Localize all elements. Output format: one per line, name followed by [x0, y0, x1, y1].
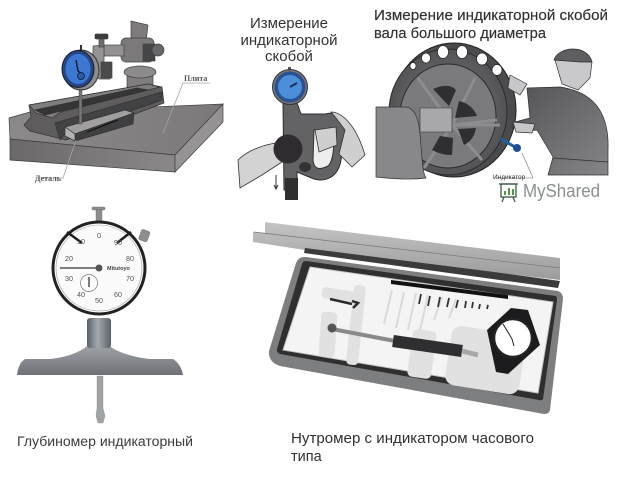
dial numbers: 60: [114, 290, 122, 299]
snap gauge heading: индикаторной: [240, 32, 338, 49]
brand: Mitutoyo: [107, 266, 131, 272]
small down arrow: [274, 175, 278, 189]
label: part: Деталь: [35, 174, 62, 183]
dial: [53, 222, 145, 314]
machine column and clamp: [93, 21, 164, 88]
bore gauge caption: Нутромер с индикатором часового: [291, 431, 534, 447]
tray: [283, 267, 553, 393]
probe: [96, 376, 105, 423]
left hand: [238, 142, 285, 188]
illustration: depth gauge: [17, 207, 193, 449]
indicator stem: [79, 88, 82, 124]
dial numbers: 70: [126, 274, 134, 283]
dial numbers: 20: [65, 254, 73, 263]
dial numbers: 30: [65, 274, 73, 283]
leader lines: [35, 83, 210, 178]
gauge body: [283, 103, 345, 200]
base: [17, 344, 183, 375]
wrench: [330, 299, 358, 308]
illustration: dial indicator on surface plate: [9, 21, 223, 183]
flywheel: [389, 43, 516, 177]
small rods: [384, 290, 456, 330]
blue dial: [272, 67, 308, 104]
label: plate: Плита: [184, 74, 207, 83]
logo icon: [499, 184, 518, 202]
dial numbers: 40: [77, 290, 85, 299]
bore gauge rod: [328, 324, 478, 355]
dial numbers: 90: [114, 238, 122, 247]
large shaft heading: Измерение индикаторной скобой: [374, 7, 608, 24]
foreground cloth: [376, 107, 426, 179]
wheel windows: [418, 78, 500, 168]
illustration: large shaft measurement: [374, 7, 608, 202]
illustration: bore gauge case: [253, 222, 563, 465]
indicator leader: [494, 153, 533, 178]
snap gauge heading: Измерение: [250, 15, 328, 32]
bore gauge dial: [487, 308, 540, 374]
tray recesses: [318, 285, 527, 396]
dial numbers: 50: [95, 296, 103, 305]
snap gauge heading: скобой: [265, 48, 313, 65]
right hand: [315, 112, 365, 167]
anvils set: [419, 294, 488, 309]
large shaft heading: вала большого диаметра: [374, 25, 547, 42]
indicator label: Индикатор: [493, 174, 526, 181]
illustration: indicator snap gauge: [238, 15, 365, 200]
lid: [253, 222, 560, 288]
top knob: [92, 207, 150, 242]
worker: [508, 49, 608, 175]
dial numbers: 80: [126, 254, 134, 263]
dial numbers: 0: [97, 231, 101, 240]
wheel holes: [410, 46, 502, 76]
logo text: MyShared: [523, 180, 600, 201]
shaft hub: [420, 108, 452, 132]
black knob: [274, 134, 302, 164]
bore gauge caption: типа: [291, 449, 323, 465]
blue indicator: [501, 139, 521, 152]
rail block: [24, 84, 164, 140]
column: [87, 318, 111, 348]
workpiece: [65, 110, 134, 141]
black strip: [391, 280, 508, 299]
surface plate: [9, 104, 223, 172]
dial numbers: 10: [77, 237, 85, 246]
blue dial indicator: [62, 45, 99, 90]
case body: [269, 257, 563, 414]
depth gauge caption: Глубиномер индикаторный: [17, 434, 193, 449]
